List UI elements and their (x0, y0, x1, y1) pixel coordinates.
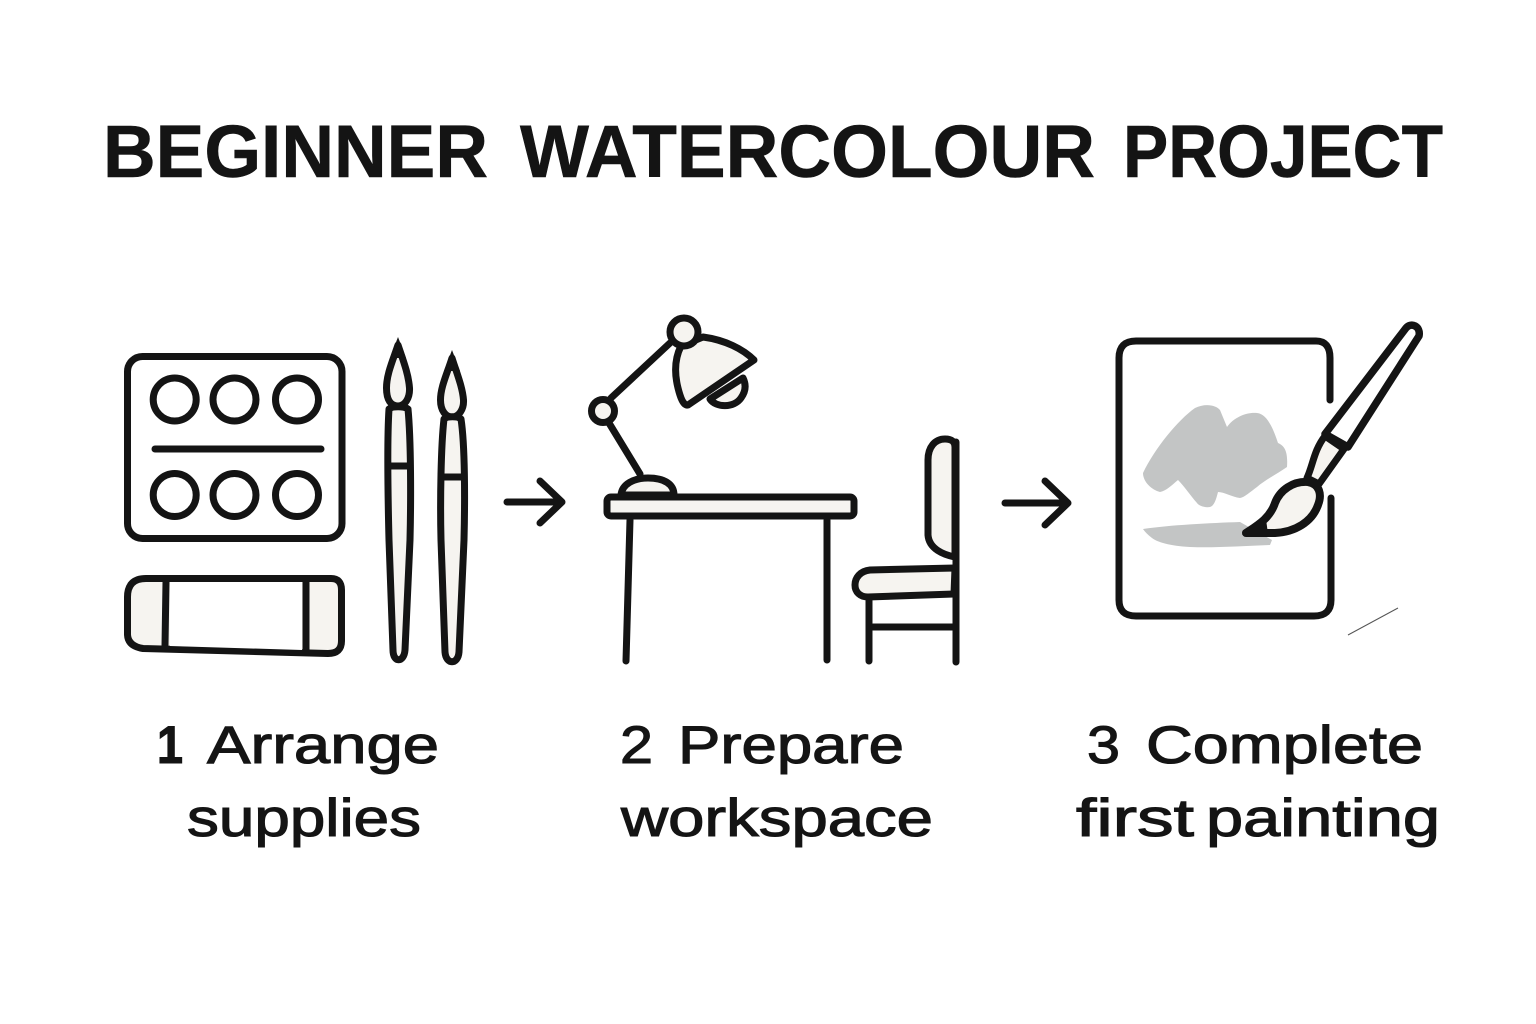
step 3 label (1076, 716, 1440, 848)
icon: chair (855, 439, 956, 662)
paint wash (1143, 405, 1287, 507)
step 2 label: Prepare (678, 716, 904, 775)
step 2 label (620, 716, 933, 848)
step 3 label: painting (1206, 789, 1440, 848)
title: WATERCOLOUR (520, 110, 1095, 193)
icon: paint tube (128, 578, 342, 654)
step 3 label: 3 (1087, 716, 1120, 775)
title: BEGINNER (103, 110, 488, 193)
title (103, 110, 1443, 193)
step 1 label: Arrange (207, 716, 439, 775)
thin pen mark (1348, 608, 1398, 635)
step 3 label: Complete (1146, 716, 1423, 775)
icon: desk (607, 497, 854, 661)
icon: angled paintbrush (1242, 325, 1419, 535)
step 1 label: supplies (187, 789, 421, 848)
step 3 label: first (1076, 789, 1194, 848)
icon: short paintbrush (440, 350, 465, 662)
icon: canvas with paint (1119, 341, 1331, 616)
step 2 label: workspace (620, 789, 933, 848)
arrow: step 2 to step 3 (1005, 481, 1068, 525)
icon: tall paintbrush (386, 337, 411, 660)
paint stroke (1143, 522, 1272, 547)
step 1 label (157, 716, 439, 848)
icon: desk lamp (592, 318, 754, 495)
step 1 label: 1 (157, 716, 183, 775)
arrow: step 1 to step 2 (507, 481, 562, 523)
icon: paint palette (128, 356, 342, 538)
step 2 label: 2 (620, 716, 653, 775)
title: PROJECT (1123, 110, 1443, 193)
paper outline (1119, 341, 1331, 616)
